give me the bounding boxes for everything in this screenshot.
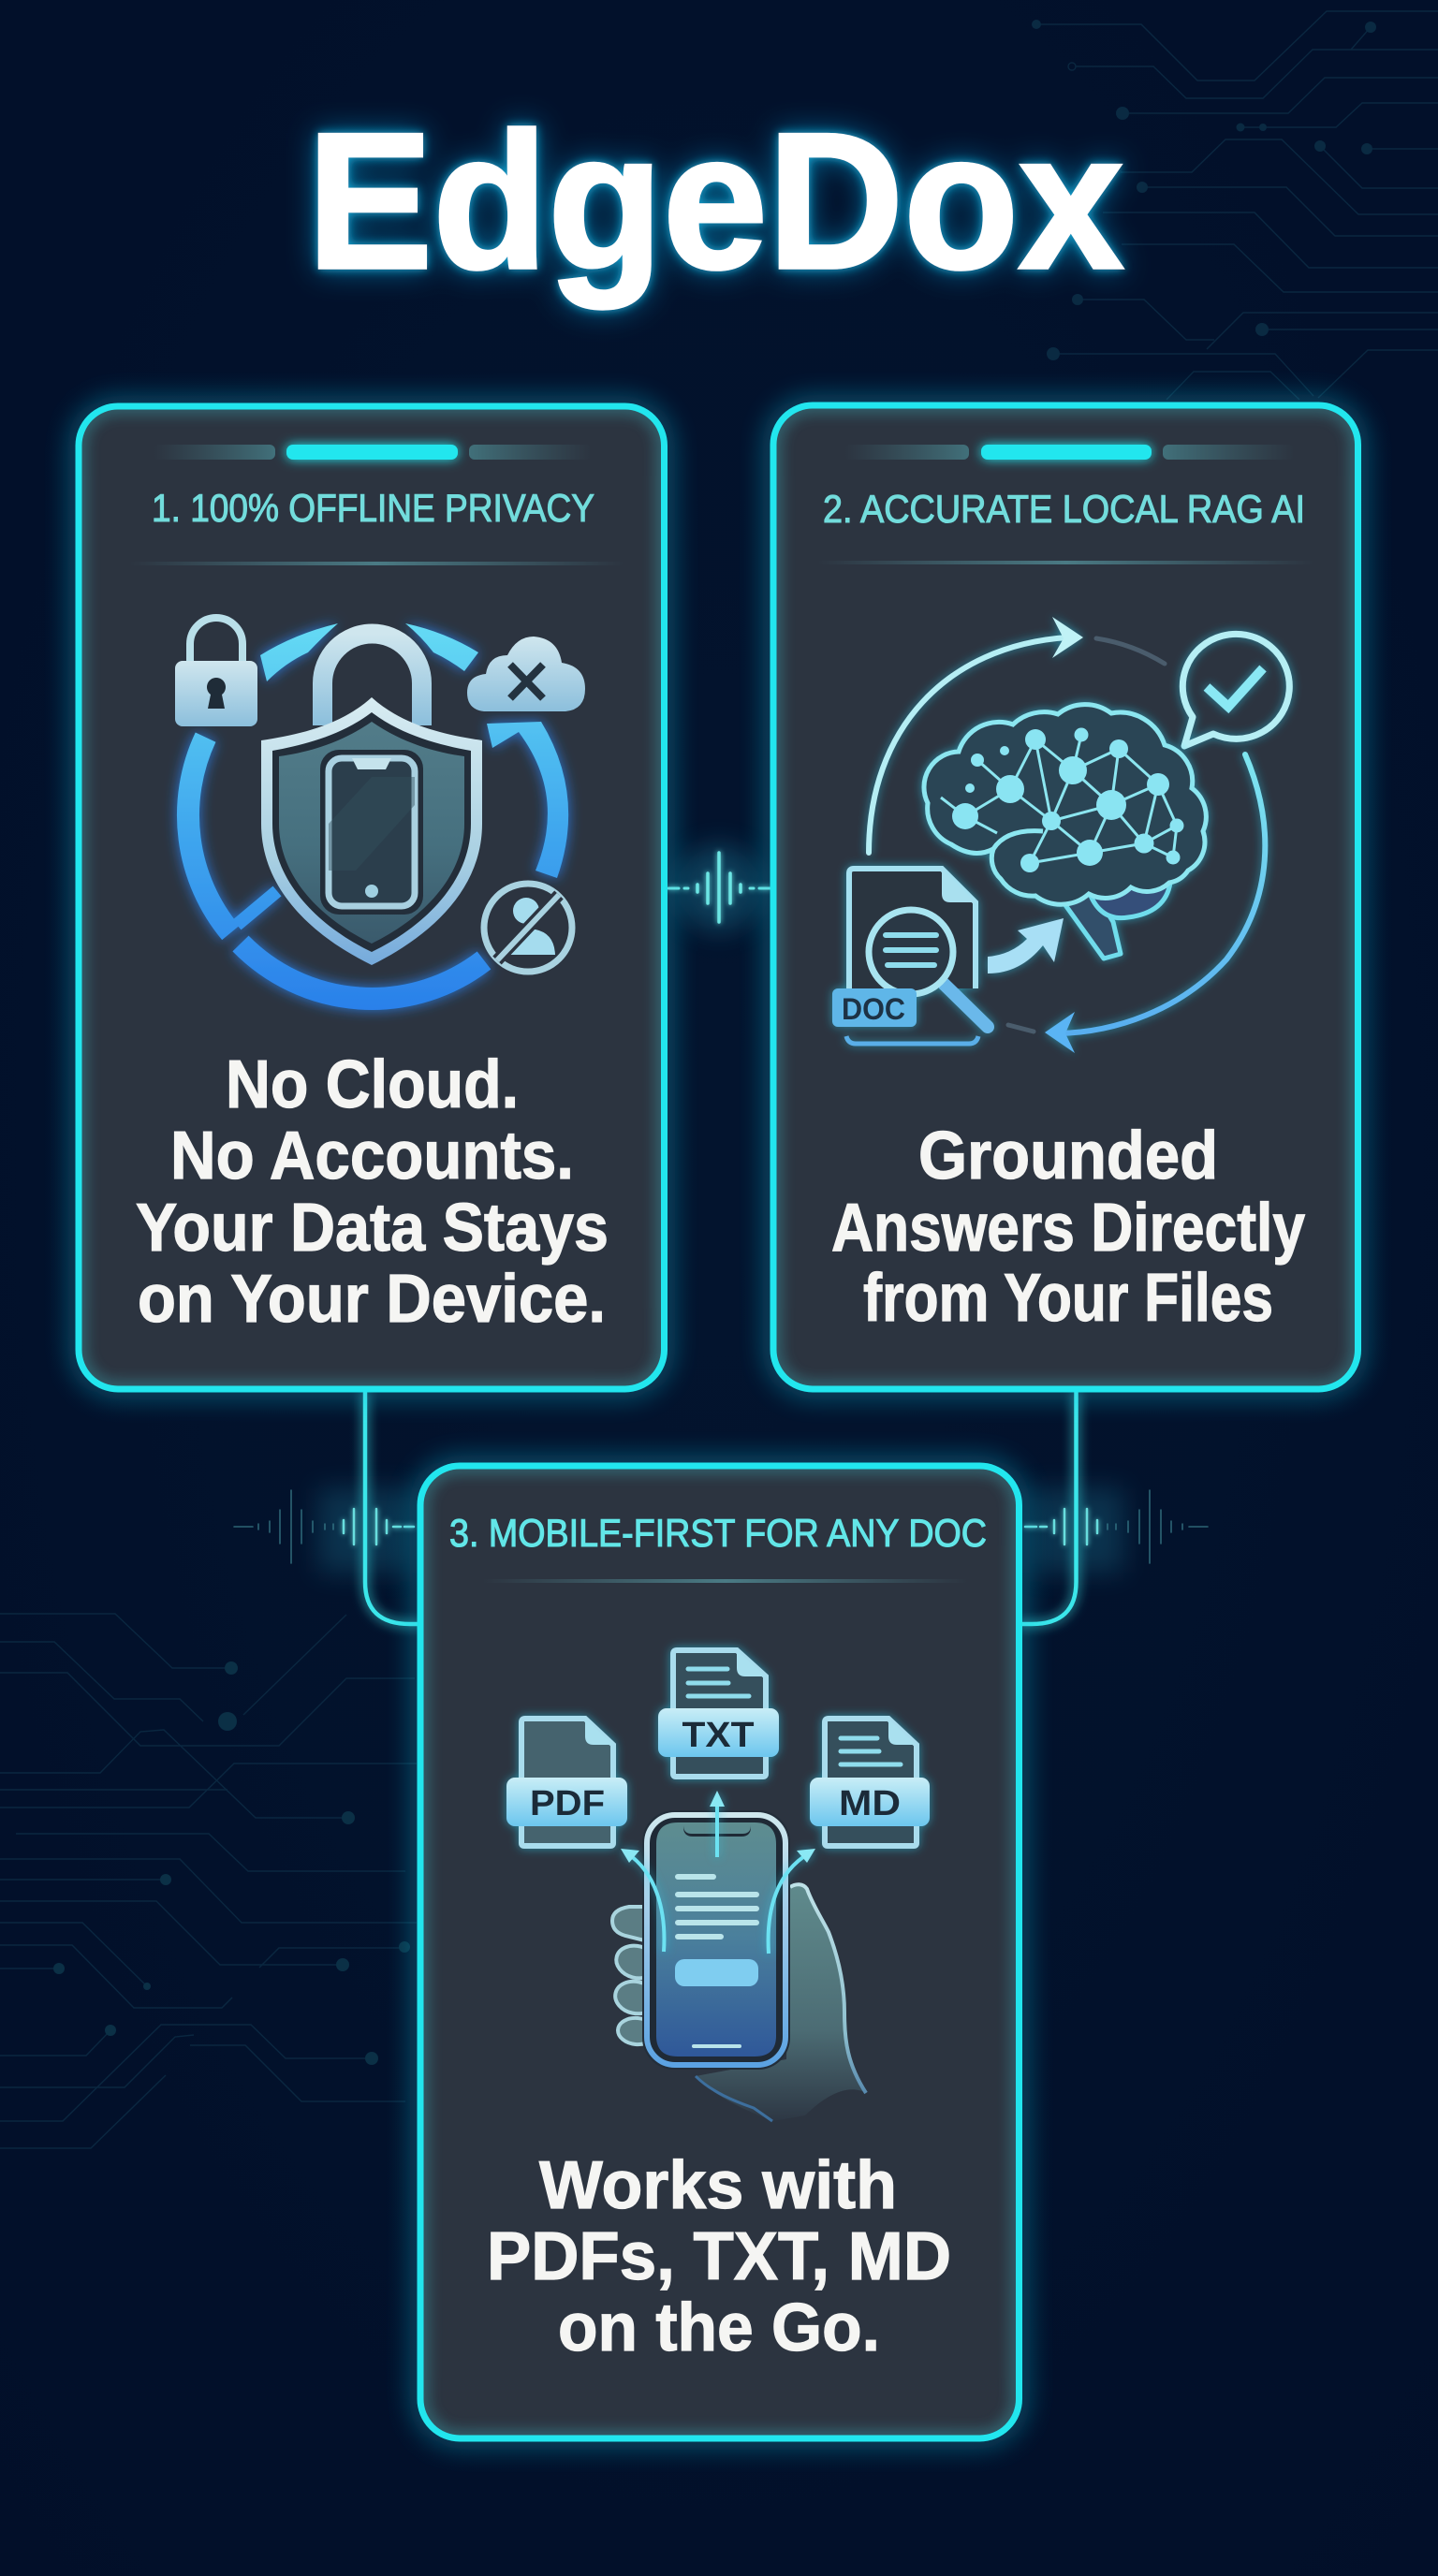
title: EdgeDox	[307, 93, 1123, 309]
icon: brain RAG loop	[832, 617, 1289, 1053]
body text: No Accounts.	[170, 1119, 574, 1193]
body text: Grounded	[918, 1119, 1218, 1193]
circuit pattern: top right	[1032, 11, 1438, 400]
icon: TXT document: TXT	[682, 1716, 755, 1755]
icon: check speech bubble	[1182, 634, 1289, 746]
panel: local RAG AI	[773, 405, 1357, 1389]
connector: card 1 to card 2	[668, 845, 770, 931]
divider	[482, 1579, 968, 1583]
body text: Answers Directly	[831, 1191, 1305, 1266]
icon: big shackle	[322, 634, 421, 725]
heading: 3. MOBILE-FIRST FOR ANY DOC	[449, 1511, 987, 1555]
circuit pattern: lower left	[0, 1614, 417, 2148]
body text	[831, 1119, 1305, 1336]
ring segments	[188, 623, 568, 999]
icon: PDF document: PDF	[530, 1784, 605, 1823]
icon: phone in shield	[320, 750, 423, 915]
body text: from Your Files	[863, 1261, 1273, 1336]
doc label: DOC	[842, 992, 905, 1026]
icon: MD document: MD	[839, 1784, 901, 1823]
arrows: phone to documents	[621, 1791, 815, 1954]
body text: No Cloud.	[226, 1047, 519, 1122]
body text: on Your Device.	[138, 1262, 606, 1337]
divider	[129, 562, 624, 565]
body text: Your Data Stays	[136, 1191, 609, 1266]
loop arrows	[869, 617, 1265, 1053]
top indicator bars	[154, 445, 592, 460]
panel: mobile first	[420, 1466, 1019, 2438]
icon: no account	[484, 884, 572, 972]
icon: MD document	[810, 1719, 930, 1846]
divider	[817, 561, 1314, 564]
icon: shield and phone in ring	[175, 618, 585, 999]
connector: left bracket with waveform	[234, 1393, 420, 1624]
body text: on the Go.	[558, 2291, 880, 2365]
body text	[136, 1047, 609, 1337]
top indicator bars	[844, 445, 1295, 460]
body text	[487, 2148, 951, 2365]
heading: 1. 100% OFFLINE PRIVACY	[152, 486, 594, 530]
icon: hand	[612, 1884, 866, 2121]
body text: Works with	[539, 2148, 897, 2223]
icon: padlock	[175, 618, 257, 726]
brain network	[941, 728, 1183, 872]
icon: TXT document	[658, 1650, 779, 1777]
panel: offline privacy	[79, 406, 665, 1389]
connector: right bracket with waveform	[1019, 1393, 1208, 1624]
icon: phone	[642, 1810, 790, 2070]
body text: PDFs, TXT, MD	[487, 2219, 951, 2294]
icon: PDF document	[506, 1719, 627, 1846]
icon: document with magnifier	[832, 869, 988, 1044]
icon: cloud with x	[467, 637, 585, 711]
heading: 2. ACCURATE LOCAL RAG AI	[823, 487, 1305, 531]
icon: brain	[924, 705, 1206, 959]
arrow: doc to brain	[988, 918, 1064, 973]
icon: shield	[261, 697, 482, 965]
